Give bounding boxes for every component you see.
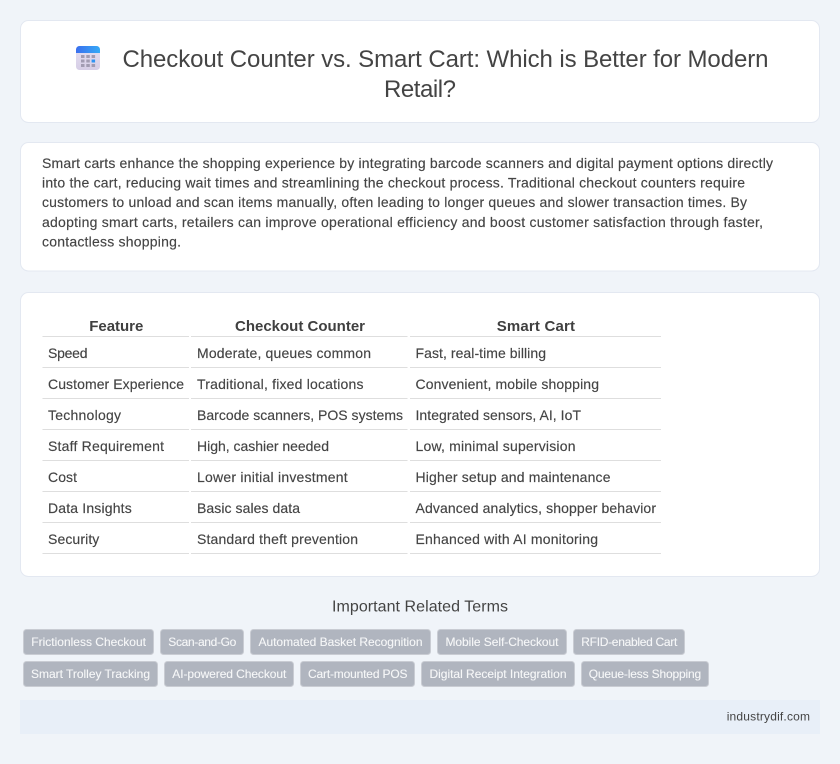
tag <box>574 630 684 654</box>
row: data insights <box>48 500 656 516</box>
row: staff requirement: Low, minimal supervision <box>416 438 576 454</box>
row: speed: Fast, real-time billing <box>416 345 546 361</box>
row: data insights: Data Insights <box>48 500 132 516</box>
footer: industrydif.com <box>727 710 810 724</box>
tag group: related terms <box>24 630 708 686</box>
row: technology <box>48 407 581 423</box>
row: data insights: Basic sales data <box>197 500 300 516</box>
row: security: Standard theft prevention <box>197 531 358 547</box>
heading: important related terms: Important Related Terms <box>332 598 508 616</box>
row: cost: Higher setup and maintenance <box>416 469 611 485</box>
tag <box>422 662 574 686</box>
tag: Frictionless Checkout <box>31 635 147 649</box>
tag: Queue-less Shopping <box>589 667 701 681</box>
row: technology: Technology <box>48 407 121 423</box>
row: customer experience <box>48 376 599 392</box>
title <box>122 46 768 103</box>
tag: Cart-mounted POS <box>308 667 408 681</box>
table header row: Feature <box>89 318 143 335</box>
tag: RFID-enabled Cart <box>581 635 678 649</box>
tag <box>582 662 708 686</box>
row: security: Enhanced with AI monitoring <box>416 531 598 547</box>
tag <box>438 630 566 654</box>
row: speed: Speed <box>48 345 88 361</box>
row: staff requirement: High, cashier needed <box>197 438 329 454</box>
tag <box>160 630 244 654</box>
tag: Smart Trolley Tracking <box>31 667 150 681</box>
row: technology: Integrated sensors, AI, IoT <box>416 407 581 423</box>
tag <box>24 630 154 654</box>
row: staff requirement <box>48 438 576 454</box>
row: cost: Cost <box>48 469 77 485</box>
row: customer experience: Traditional, fixed locations <box>197 376 364 392</box>
text block: intro paragraph <box>42 155 773 249</box>
text block: intro paragraph: Smart carts enhance the shopping experience by integrating barcode scanners and digital payment options directly <box>42 155 773 171</box>
row: customer experience: Customer Experience <box>48 376 184 392</box>
tag: Mobile Self-Checkout <box>446 635 559 649</box>
row: staff requirement: Staff Requirement <box>48 438 164 454</box>
table header row: Checkout Counter <box>235 318 365 335</box>
row: security: Security <box>48 531 99 547</box>
text block: intro paragraph: into the cart, reducing wait times and streamlining the checkout process. Traditional checkout counters require <box>42 175 745 191</box>
row: data insights: Advanced analytics, shopper behavior <box>416 500 656 516</box>
tag: Scan-and-Go <box>168 635 237 649</box>
text block: intro paragraph: adopting smart carts, retailers can improve operational efficiency and boost customer satisfaction through faster, <box>42 214 763 230</box>
row: cost <box>48 469 611 485</box>
row: customer experience: Convenient, mobile shopping <box>416 376 599 392</box>
row: technology: Barcode scanners, POS systems <box>197 407 403 423</box>
tag: Digital Receipt Integration <box>430 667 566 681</box>
footer <box>20 700 820 734</box>
tag <box>250 630 430 654</box>
row: speed <box>48 345 546 361</box>
table header row: Smart Cart <box>497 318 575 335</box>
panel: title header <box>20 20 820 122</box>
title: Checkout Counter vs. Smart Cart: Which is Better for Modern <box>122 46 768 73</box>
tag <box>24 662 158 686</box>
row: cost: Lower initial investment <box>197 469 348 485</box>
text block: intro paragraph: customers to unload and scan items manually, often leading to longer queues and slower transaction times. By <box>42 194 747 210</box>
tag <box>300 662 414 686</box>
text block: intro paragraph: contactless shopping. <box>42 233 181 249</box>
panel: comparison table <box>20 292 820 576</box>
panel: intro text <box>20 142 820 271</box>
tag <box>164 662 294 686</box>
icon: calendar grid <box>76 46 100 70</box>
table header row <box>89 318 575 335</box>
title: Retail? <box>384 76 456 103</box>
row: speed: Moderate, queues common <box>197 345 371 361</box>
tag: AI-powered Checkout <box>172 667 287 681</box>
tag: Automated Basket Recognition <box>258 635 422 649</box>
row: security <box>48 531 598 547</box>
